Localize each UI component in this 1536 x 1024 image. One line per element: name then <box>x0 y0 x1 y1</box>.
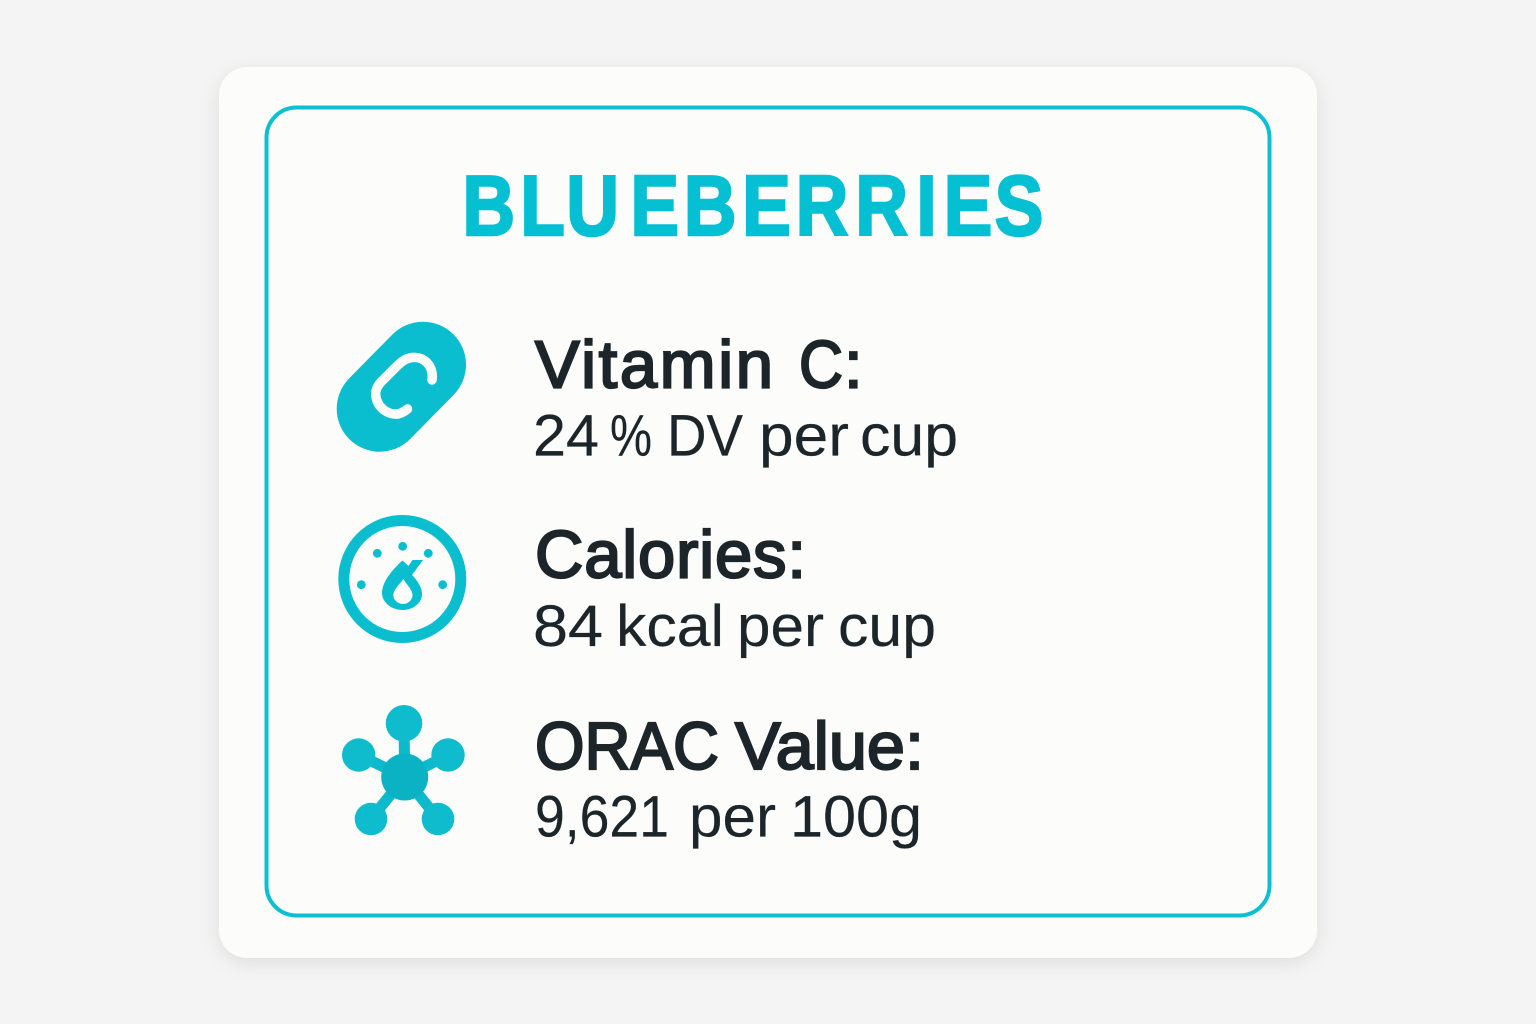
icon: antioxidant molecule <box>342 705 465 835</box>
text: vitamin C: C <box>799 328 843 402</box>
text: vitamin C: % <box>610 404 652 469</box>
icon: calorie gauge <box>344 520 461 638</box>
text: ORAC value: 100g <box>790 784 922 850</box>
text: vitamin C: cup <box>860 404 958 469</box>
text: vitamin C: per <box>759 404 849 469</box>
text: vitamin C: DV <box>667 404 743 469</box>
text: vitamin C <box>533 328 958 469</box>
text: ORAC value: Value: <box>735 709 924 784</box>
text: ORAC value: ORAC <box>535 709 719 784</box>
text: vitamin C: Vitamin <box>535 328 773 402</box>
text: calories: cup <box>838 594 936 659</box>
text: calories: kcal <box>616 594 724 659</box>
text: calories: per <box>737 594 824 659</box>
title: BLUEBERRIES <box>462 158 1043 253</box>
text: ORAC value <box>535 709 924 850</box>
text: vitamin C: 24 <box>533 404 599 469</box>
text: calories: Calories: <box>535 518 806 592</box>
text: calories: 84 <box>533 594 603 659</box>
panel: card <box>219 67 1317 958</box>
card inner border <box>266 108 1270 916</box>
text: calories <box>533 518 936 659</box>
text: ORAC value: per <box>689 784 776 850</box>
icon: vitamin C pill <box>376 357 432 414</box>
text: vitamin C: : <box>844 328 863 402</box>
text: ORAC value: 9,621 <box>535 784 669 850</box>
